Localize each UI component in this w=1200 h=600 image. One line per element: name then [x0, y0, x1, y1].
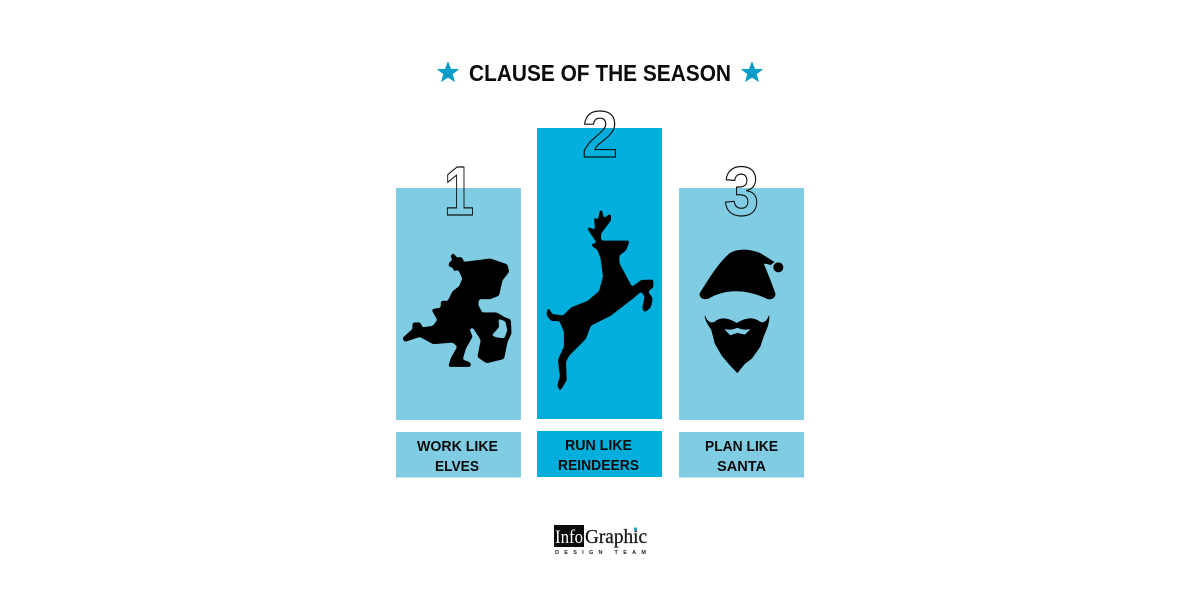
- icon: santa hat and beard: [700, 250, 783, 373]
- number 3: 3: [724, 152, 759, 230]
- column 3: [679, 188, 804, 420]
- column 1: [396, 188, 521, 420]
- number 1: 1: [444, 152, 474, 230]
- label box 3: PLAN LIKE: [705, 439, 778, 455]
- label box 1: [396, 432, 521, 478]
- column 2: [537, 128, 662, 419]
- panel: work like elves: [396, 152, 521, 478]
- icon: right star: [742, 62, 762, 82]
- icon: elf silhouette: [403, 254, 511, 366]
- label box 1: ELVES: [435, 459, 479, 475]
- logo: InfoGraphic Design Team: DESIGN TEAM: [555, 550, 646, 556]
- label box 3: SANTA: [717, 459, 767, 475]
- label box 1: WORK LIKE: [417, 439, 498, 455]
- icon: left star: [438, 62, 458, 82]
- icon: reindeer silhouette: [548, 211, 652, 389]
- logo: InfoGraphic Design Team: Graphic: [585, 526, 647, 548]
- label box 2: RUN LIKE: [565, 438, 632, 454]
- logo: InfoGraphic Design Team: [554, 525, 647, 556]
- label box 2: REINDEERS: [558, 458, 639, 474]
- title with stars: [438, 60, 762, 86]
- number 2: 2: [582, 97, 618, 171]
- panel: run like reindeers: [537, 97, 662, 477]
- panel: plan like santa: [679, 152, 804, 478]
- label box 3: [679, 432, 804, 478]
- label box 2: [537, 431, 662, 477]
- heading: CLAUSE OF THE SEASON: [469, 60, 731, 86]
- logo: InfoGraphic Design Team: Info: [555, 527, 583, 548]
